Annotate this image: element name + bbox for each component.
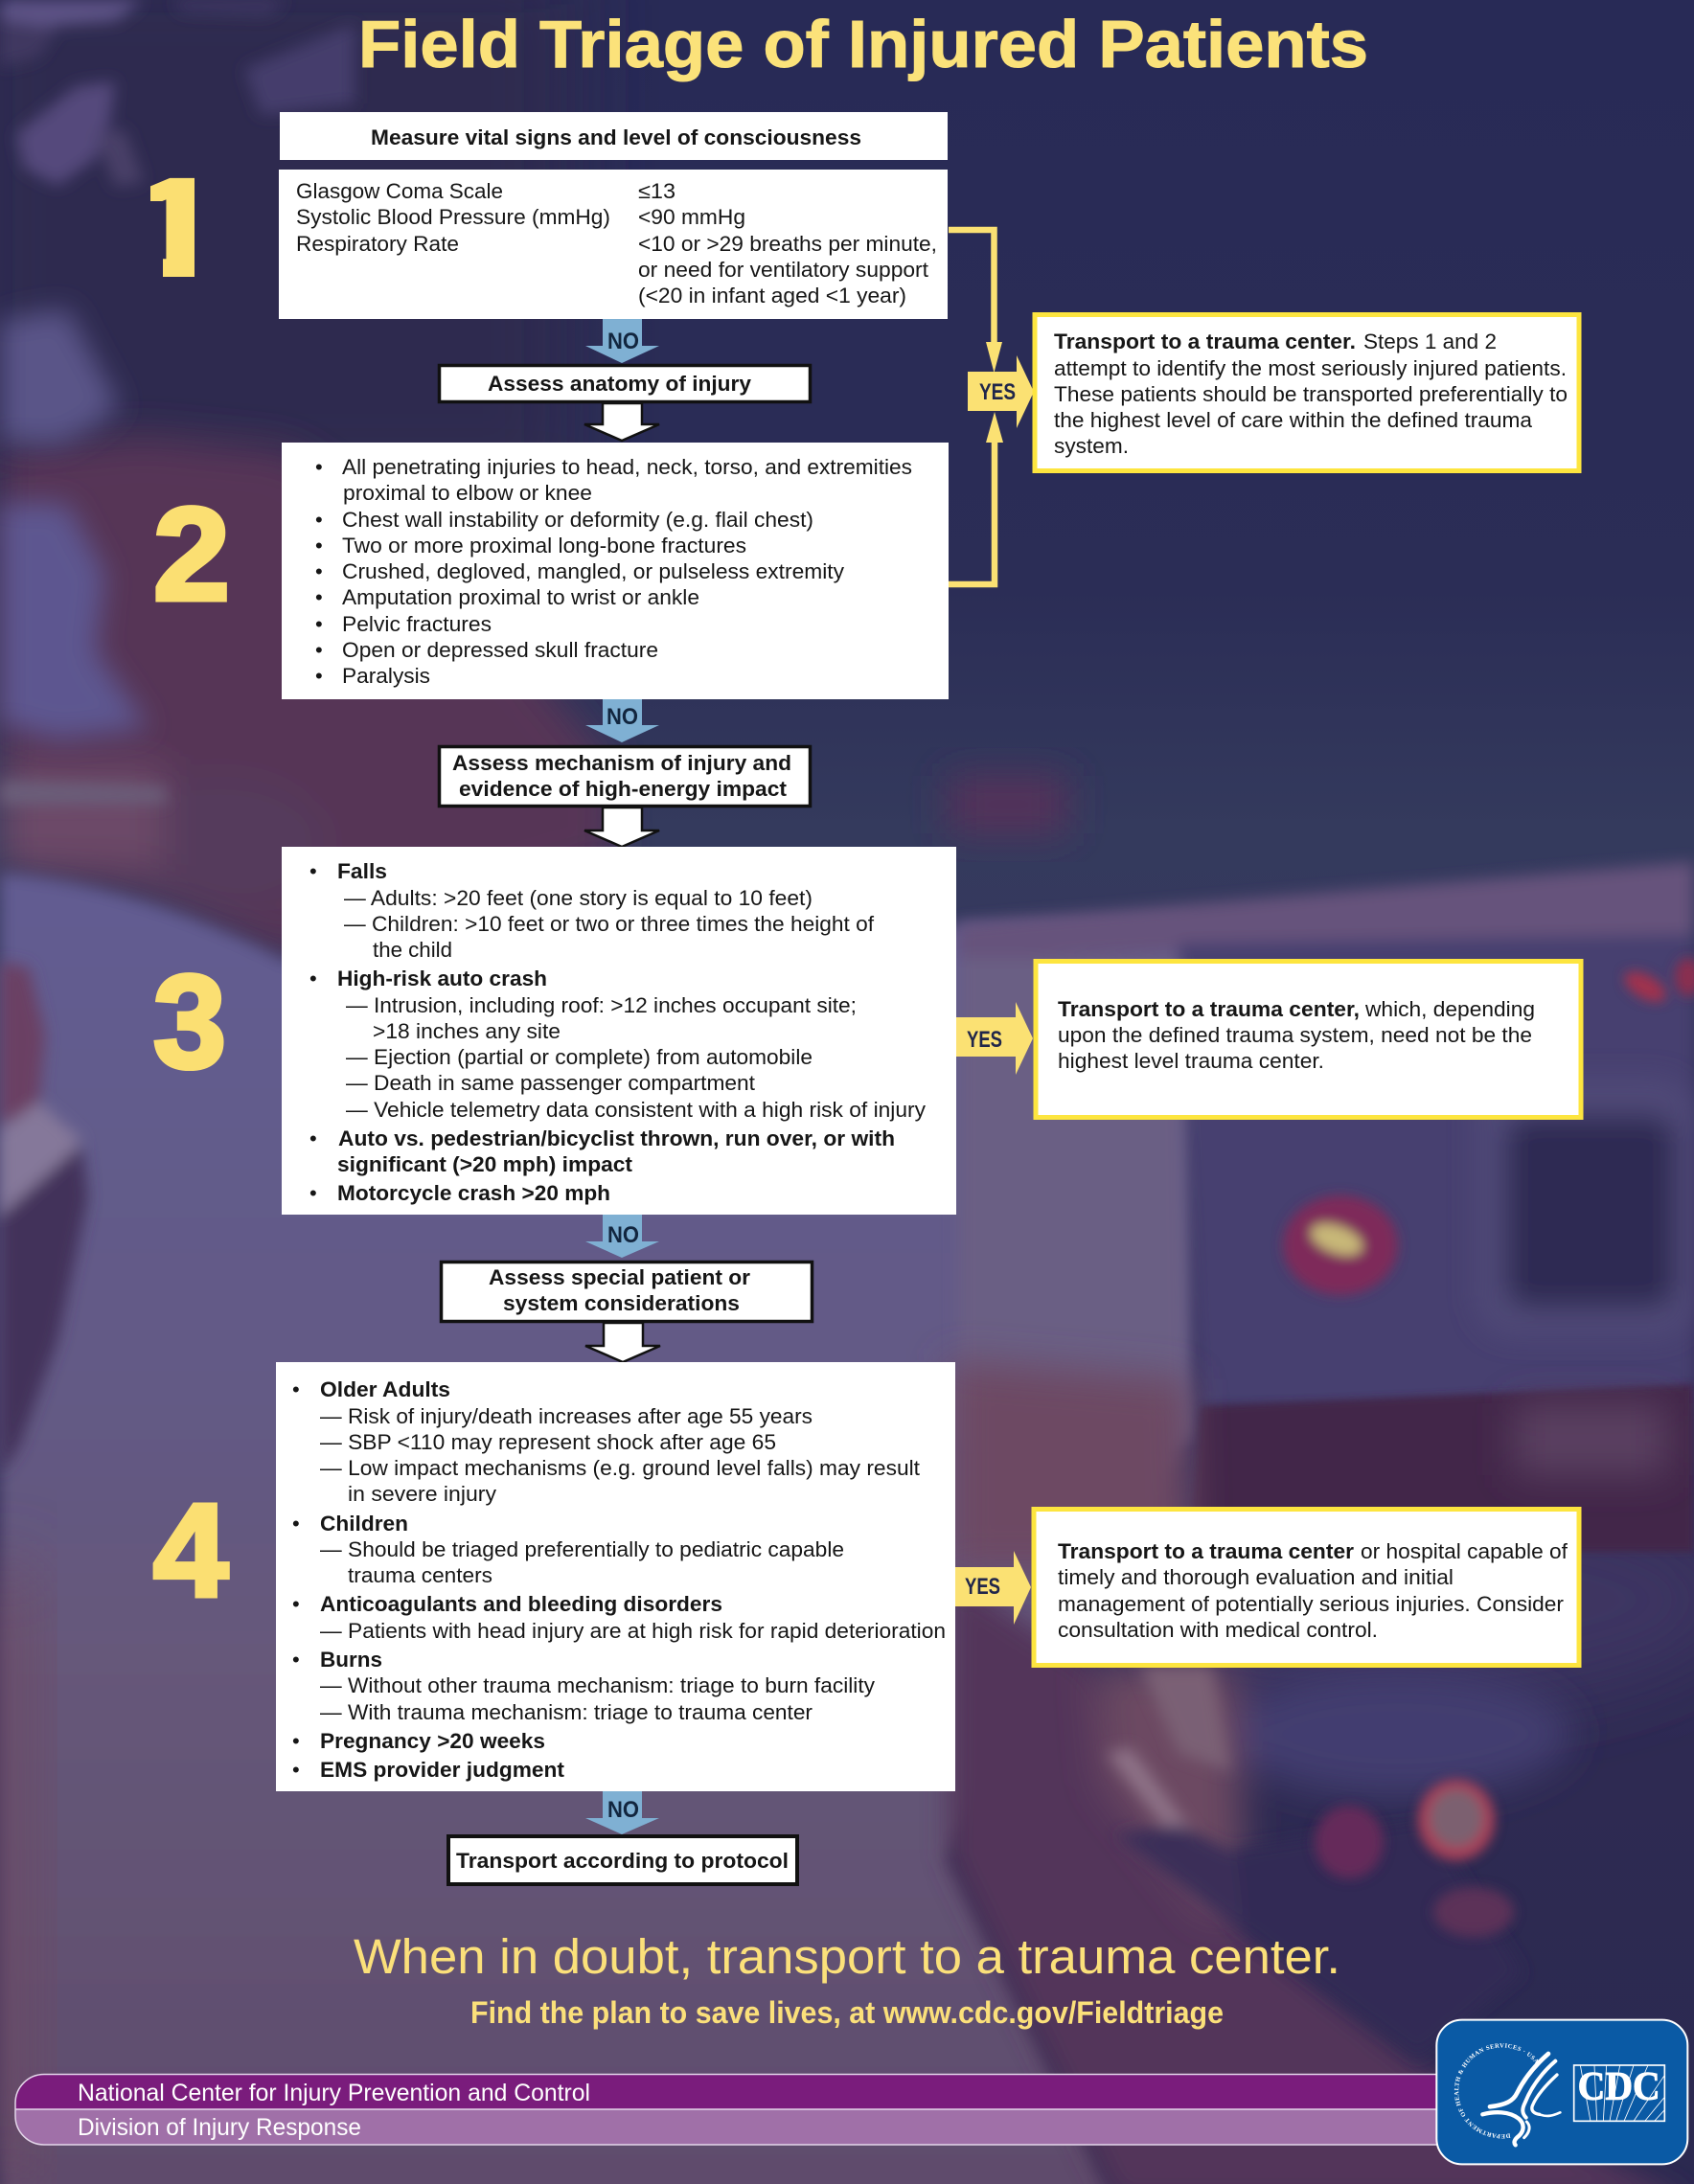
panel: step 2 anatomy criteria: • bbox=[315, 612, 323, 636]
panel: step 1 vital sign criteria: ≤13 bbox=[638, 179, 675, 203]
panel: step 4 special considerations bbox=[276, 1362, 955, 1791]
panel: step 3 mechanism criteria: the child bbox=[373, 938, 452, 962]
panel: step 1 vital sign criteria: <90 mmHg bbox=[638, 205, 745, 229]
panel: first trauma center outcome: system. bbox=[1054, 434, 1129, 458]
panel: step 4 special considerations: Pregnancy >20 weeks bbox=[320, 1729, 545, 1753]
panel: step 3 mechanism criteria: — Adults: >20 feet (one story is equal to 10 feet) bbox=[344, 886, 813, 910]
panel: step 2 anatomy criteria bbox=[282, 443, 949, 699]
panel: first trauma center outcome: Transport to a trauma center. bbox=[1054, 330, 1356, 353]
panel: step 2 anatomy criteria: proximal to elbow or knee bbox=[343, 481, 592, 505]
box: assess anatomy of injury bbox=[439, 366, 811, 402]
panel: step 3 mechanism criteria bbox=[282, 847, 956, 1215]
step number 3: 3 bbox=[153, 948, 226, 1096]
streaks and lights bbox=[1107, 1667, 1523, 2059]
panel: step 3 mechanism criteria: • bbox=[309, 859, 317, 883]
panel: step 3 mechanism criteria: • bbox=[309, 1126, 317, 1150]
panel: step 4 special considerations: Older Adults bbox=[320, 1377, 450, 1401]
panel: step 2 anatomy criteria: • bbox=[315, 534, 323, 557]
panel: step 2 anatomy criteria: Chest wall instability or deformity (e.g. flail chest) bbox=[342, 508, 813, 532]
footer bars: organization names: Division of Injury Response bbox=[78, 2114, 361, 2141]
panel: second trauma center outcome: highest level trauma center. bbox=[1058, 1049, 1324, 1073]
panel: step 4 special considerations: Burns bbox=[320, 1648, 382, 1672]
panel: step 2 anatomy criteria: Crushed, degloved, mangled, or pulseless extremity bbox=[342, 559, 844, 583]
box: assess anatomy of injury: Assess anatomy of injury bbox=[488, 372, 752, 396]
arrow: no from step 4: NO bbox=[607, 1797, 639, 1823]
panel: step 2 anatomy criteria: • bbox=[315, 455, 323, 479]
arrow: white arrow to step 3 bbox=[584, 808, 659, 847]
panel: step 3 mechanism criteria: — Vehicle telemetry data consistent with a high risk of injury bbox=[346, 1098, 926, 1122]
lower left ambulance side bbox=[0, 874, 1188, 2184]
panel: step 3 mechanism criteria: >18 inches any site bbox=[373, 1019, 561, 1043]
icon: HHS eagle seal: DEPARTMENT OF HEALTH & HUMAN SERVICES · USA bbox=[1454, 2043, 1539, 2138]
panel: step 4 special considerations: — SBP <110 may represent shock after age 65 bbox=[320, 1430, 776, 1454]
arrow: no from step 1 bbox=[585, 319, 659, 363]
panel: step 4 special considerations: • bbox=[292, 1377, 300, 1401]
arrow: white arrow to step 2 bbox=[584, 403, 659, 441]
box: transport according to protocol: Transport according to protocol bbox=[456, 1849, 789, 1873]
footer bars: organization names bbox=[15, 2075, 1442, 2145]
panel: step 4 special considerations: Anticoagulants and bleeding disorders bbox=[320, 1592, 722, 1616]
panel: step 2 anatomy criteria: • bbox=[315, 508, 323, 532]
panel: step 3 mechanism criteria: • bbox=[309, 967, 317, 990]
panel: third trauma center outcome: management of potentially serious injuries. Consider bbox=[1058, 1592, 1564, 1616]
box: assess mechanism of injury: Assess mechanism of injury and bbox=[452, 751, 791, 775]
panel: step 2 anatomy criteria: Two or more proximal long-bone fractures bbox=[342, 534, 746, 557]
panel: third trauma center outcome: Transport to a trauma center bbox=[1058, 1539, 1354, 1563]
panel: step 2 anatomy criteria: Amputation proximal to wrist or ankle bbox=[342, 585, 699, 609]
arrow: yes to second trauma center outcome bbox=[956, 1002, 1033, 1075]
step number 4: 4 bbox=[153, 1477, 228, 1625]
panel: step 2 anatomy criteria: • bbox=[315, 638, 323, 662]
arrow: no from step 1: NO bbox=[607, 329, 639, 354]
panel: first trauma center outcome bbox=[1035, 314, 1579, 471]
box: assess mechanism of injury: evidence of high-energy impact bbox=[459, 777, 788, 801]
panel: step 4 special considerations: — Low impact mechanisms (e.g. ground level falls) may result bbox=[320, 1456, 920, 1480]
arrow: yes to first trauma center outcome bbox=[968, 355, 1034, 428]
maroon patch beside step 3 bbox=[949, 776, 1067, 833]
panel: step 1 vital sign criteria bbox=[279, 170, 948, 319]
box: assess special considerations: system considerations bbox=[503, 1291, 740, 1315]
panel: step 2 anatomy criteria: • bbox=[315, 585, 323, 609]
panel: step 2 anatomy criteria: Open or depressed skull fracture bbox=[342, 638, 658, 662]
panel: step 3 mechanism criteria: Auto vs. pedestrian/bicyclist thrown, run over, or with bbox=[338, 1126, 895, 1150]
panel: step 4 special considerations: • bbox=[292, 1648, 300, 1672]
panel: step 4 special considerations: — Patients with head injury are at high risk for rapid deterioration bbox=[320, 1619, 946, 1643]
panel: measure vital signs header bbox=[280, 112, 948, 160]
panel: step 3 mechanism criteria: — Death in same passenger compartment bbox=[346, 1071, 755, 1095]
panel: step 4 special considerations: trauma centers bbox=[348, 1563, 492, 1587]
slogan: when in doubt: When in doubt, transport to a trauma center. bbox=[354, 1929, 1340, 1984]
panel: second trauma center outcome: which, depending bbox=[1364, 997, 1535, 1021]
footer bars: organization names: National Center for Injury Prevention and Control bbox=[78, 2080, 590, 2106]
panel: step 3 mechanism criteria: — Ejection (partial or complete) from automobile bbox=[346, 1045, 813, 1069]
panel: first trauma center outcome: attempt to identify the most seriously injured patients. bbox=[1054, 356, 1567, 380]
arrow: yes to first trauma center outcome: YES bbox=[979, 379, 1016, 405]
panel: step 2 anatomy criteria: All penetrating injuries to head, neck, torso, and extremities bbox=[342, 455, 912, 479]
arrow: yes to third trauma center outcome bbox=[955, 1551, 1031, 1625]
box: assess special considerations: Assess special patient or bbox=[489, 1265, 750, 1289]
panel: step 3 mechanism criteria: High-risk auto crash bbox=[337, 967, 547, 990]
step number 2: 2 bbox=[153, 481, 230, 628]
panel: step 1 vital sign criteria: Systolic Blood Pressure (mmHg) bbox=[296, 205, 610, 229]
arrow: no from step 2: NO bbox=[607, 704, 638, 730]
step number 1: 1 bbox=[119, 150, 238, 305]
panel: step 3 mechanism criteria: • bbox=[309, 1181, 317, 1205]
panel: first trauma center outcome: These patients should be transported preferentially to bbox=[1054, 382, 1568, 406]
panel: step 4 special considerations: — Should be triaged preferentially to pediatric capable bbox=[320, 1537, 844, 1561]
sky patches bbox=[0, 0, 355, 187]
panel: third trauma center outcome: timely and thorough evaluation and initial bbox=[1058, 1565, 1454, 1589]
arrow: no from step 2 bbox=[585, 699, 659, 742]
panel: step 4 special considerations: • bbox=[292, 1729, 300, 1753]
panel: step 4 special considerations: — With trauma mechanism: triage to trauma center bbox=[320, 1700, 813, 1724]
box: assess special considerations bbox=[441, 1263, 813, 1322]
panel: second trauma center outcome bbox=[1036, 962, 1581, 1117]
panel: step 1 vital sign criteria: (<20 in infant aged <1 year) bbox=[638, 284, 906, 307]
panel: step 4 special considerations: in severe injury bbox=[348, 1482, 496, 1506]
title: Field Triage of Injured Patients bbox=[358, 7, 1368, 81]
panel: step 4 special considerations: — Risk of injury/death increases after age 55 years bbox=[320, 1404, 813, 1428]
left sky and roof: maroon area bbox=[0, 436, 613, 958]
arrow: step 1 yes connector bbox=[949, 230, 1002, 373]
panel: step 1 vital sign criteria: Glasgow Coma Scale bbox=[296, 179, 503, 203]
arrow: yes to third trauma center outcome: YES bbox=[965, 1574, 1000, 1600]
arrow: yes to second trauma center outcome: YES bbox=[967, 1027, 1002, 1053]
panel: step 4 special considerations: • bbox=[292, 1758, 300, 1782]
lower maroon diagonal bbox=[949, 1571, 1694, 2184]
panel: step 3 mechanism criteria: significant (>20 mph) impact bbox=[337, 1152, 633, 1176]
panel: measure vital signs header: Measure vital signs and level of consciousness bbox=[371, 125, 861, 149]
arrow: no from step 3 bbox=[585, 1215, 659, 1258]
panel: step 2 anatomy criteria: Pelvic fractures bbox=[342, 612, 492, 636]
panel: step 4 special considerations: • bbox=[292, 1512, 300, 1536]
panel: step 4 special considerations: EMS provider judgment bbox=[320, 1758, 565, 1782]
panel: step 1 vital sign criteria: <10 or >29 breaths per minute, bbox=[638, 232, 937, 256]
panel: first trauma center outcome: the highest level of care within the defined trauma bbox=[1054, 408, 1533, 432]
panel: third trauma center outcome bbox=[1034, 1510, 1579, 1665]
ambulance window bbox=[1476, 1078, 1694, 1336]
panel: third trauma center outcome: consultation with medical control. bbox=[1058, 1618, 1378, 1642]
panel: step 2 anatomy criteria: Paralysis bbox=[342, 664, 430, 688]
panel: step 1 vital sign criteria: or need for ventilatory support bbox=[638, 258, 928, 282]
panel: step 2 anatomy criteria: • bbox=[315, 664, 323, 688]
arrow: no from step 3: NO bbox=[607, 1222, 639, 1248]
panel: second trauma center outcome: upon the defined trauma system, need not be the bbox=[1058, 1023, 1532, 1047]
box: assess mechanism of injury bbox=[439, 747, 811, 807]
panel: third trauma center outcome: or hospital capable of bbox=[1361, 1539, 1568, 1563]
lower maroon band bbox=[1188, 1384, 1694, 1552]
panel: step 4 special considerations: — Without other trauma mechanism: triage to burn facility bbox=[320, 1673, 875, 1697]
icon: CDC logo: CDC bbox=[1578, 2064, 1660, 2109]
subtitle: find the plan: Find the plan to save lives, at www.cdc.gov/Fieldtriage bbox=[470, 1995, 1224, 2030]
panel: step 3 mechanism criteria: — Children: >10 feet or two or three times the height of bbox=[344, 912, 875, 936]
panel: step 1 vital sign criteria: Respiratory Rate bbox=[296, 232, 459, 256]
panel: step 2 anatomy criteria: • bbox=[315, 559, 323, 583]
arrow: no from step 4 bbox=[585, 1791, 659, 1834]
panel: first trauma center outcome: Steps 1 and 2 bbox=[1363, 330, 1497, 353]
arrow: white arrow to step 4 bbox=[585, 1323, 660, 1362]
panel: step 4 special considerations: • bbox=[292, 1592, 300, 1616]
panel: step 3 mechanism criteria: — Intrusion, including roof: >12 inches occupant site; bbox=[346, 993, 857, 1017]
logo: HHS and CDC badge bbox=[1435, 2019, 1688, 2165]
panel: step 4 special considerations: Children bbox=[320, 1512, 408, 1536]
panel: step 3 mechanism criteria: Falls bbox=[337, 859, 387, 883]
arrow: step 2 yes connector bbox=[949, 412, 1003, 584]
panel: step 3 mechanism criteria: Motorcycle crash >20 mph bbox=[337, 1181, 610, 1205]
roof band bbox=[958, 862, 1694, 1437]
box: transport according to protocol bbox=[448, 1836, 797, 1884]
panel: second trauma center outcome: Transport to a trauma center, bbox=[1058, 997, 1360, 1021]
